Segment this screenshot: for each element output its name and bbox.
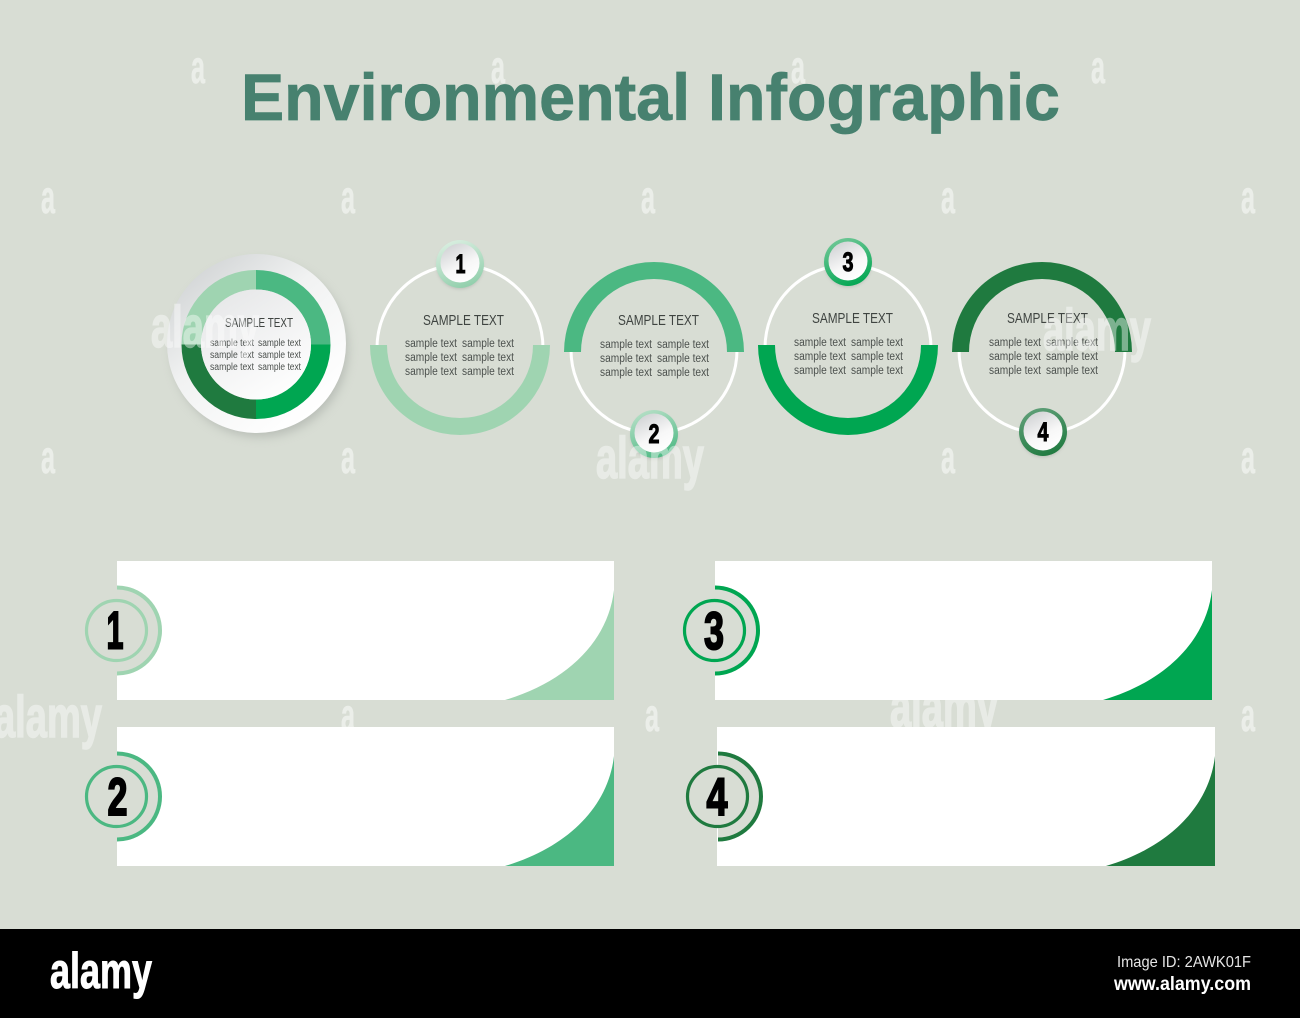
heading 3: SAMPLE TEXT (812, 310, 893, 327)
donut segment: light green (182, 270, 256, 344)
watermarks: alamy (1043, 298, 1151, 363)
badge 4: 4 (1038, 417, 1048, 447)
text 2: sample text (600, 367, 653, 379)
watermarks: a (791, 41, 805, 93)
text 4: sample text (1046, 365, 1099, 377)
text 2: sample text (657, 339, 710, 351)
text 3: sample text (851, 337, 904, 349)
watermarks: a (1091, 41, 1105, 93)
donut text: sample text (210, 362, 254, 373)
number marker 4: 4 (706, 768, 728, 827)
arc: dark green upper (952, 262, 1132, 352)
title: Environmental Infographic (241, 60, 1060, 134)
watermarks: alamy (596, 426, 704, 491)
watermarks: alamy (151, 295, 259, 360)
text 2: sample text (657, 367, 710, 379)
footer logo: alamy (50, 943, 152, 999)
text 3 (794, 337, 904, 377)
panel: circle 1 (370, 240, 550, 435)
text 4: sample text (989, 337, 1042, 349)
donut text: sample text (258, 350, 301, 361)
watermarks: a (1241, 431, 1255, 483)
badge 1: 1 (456, 249, 466, 279)
text 1: sample text (462, 366, 515, 378)
footer bar (0, 929, 1300, 1018)
donut text: sample text (258, 338, 301, 349)
text 3: sample text (794, 365, 847, 377)
badge 3: 3 (842, 247, 854, 277)
watermarks: a (41, 171, 55, 223)
text 2: sample text (657, 353, 710, 365)
text 1: sample text (405, 338, 458, 350)
donut segment: bright green (256, 344, 330, 419)
panel: circle 4 (952, 262, 1132, 457)
text 4: sample text (1046, 351, 1099, 363)
watermarks (0, 41, 1255, 750)
watermarks: a (191, 41, 205, 93)
number marker 2: 2 (108, 768, 128, 827)
badge 2 (630, 410, 678, 459)
donut text: sample text (210, 338, 254, 349)
arc: light green lower (370, 345, 550, 435)
panel: card 3 (684, 561, 1212, 700)
text 1: sample text (462, 338, 515, 350)
number marker 2 (86, 752, 162, 841)
watermarks: a (941, 431, 955, 483)
arc: mid green upper (564, 262, 744, 352)
panel: overview donut (167, 254, 348, 437)
donut text: sample text (210, 350, 254, 361)
text 3: sample text (851, 365, 904, 377)
badge 3 (824, 238, 872, 287)
panel: circle 3 (758, 238, 938, 435)
heading 2: SAMPLE TEXT (618, 312, 699, 329)
watermarks: a (341, 689, 355, 741)
text 4: sample text (989, 365, 1042, 377)
donut centre disc (201, 290, 311, 400)
heading 1: SAMPLE TEXT (423, 312, 504, 329)
card corner 2 (505, 756, 614, 866)
donut text (210, 338, 301, 373)
text 2: sample text (600, 339, 653, 351)
text 1: sample text (405, 352, 458, 364)
badge 2: 2 (648, 419, 660, 449)
watermarks: a (941, 171, 955, 223)
text 4: sample text (1046, 337, 1099, 349)
number marker 1: 1 (106, 602, 124, 660)
watermarks: a (341, 431, 355, 483)
number marker 3: 3 (704, 602, 724, 661)
watermarks: a (41, 431, 55, 483)
text 3: sample text (851, 351, 904, 363)
text 3: sample text (794, 351, 847, 363)
text 4 (989, 337, 1099, 377)
number marker 3 (684, 586, 760, 675)
arc: bright green lower (758, 345, 938, 435)
donut segment: dark green (182, 344, 256, 419)
website: www.alamy.com (1113, 974, 1251, 995)
text 2 (600, 339, 710, 379)
card corner 3 (1103, 590, 1212, 700)
donut segment: mid green (256, 270, 330, 344)
text 1 (405, 338, 515, 378)
text 1: sample text (405, 366, 458, 378)
card corner 4 (1106, 756, 1215, 866)
watermarks: a (1241, 171, 1255, 223)
watermarks: a (491, 41, 505, 93)
text 3: sample text (794, 337, 847, 349)
card corner 1 (505, 590, 614, 700)
watermarks: a (341, 171, 355, 223)
text 4: sample text (989, 351, 1042, 363)
badge 1 (436, 240, 484, 289)
text 1: sample text (462, 352, 515, 364)
donut heading: SAMPLE TEXT (225, 315, 293, 330)
panel: circle 2 (564, 262, 744, 459)
heading 4: SAMPLE TEXT (1007, 310, 1088, 327)
watermarks: a (645, 689, 659, 741)
number marker 1 (86, 586, 162, 675)
panel: card 1 (86, 561, 614, 700)
panel: card 2 (86, 727, 614, 866)
number marker 4 (688, 752, 763, 841)
watermarks: a (641, 171, 655, 223)
image id: Image ID: 2AWK01F (1117, 954, 1251, 971)
donut text: sample text (258, 362, 301, 373)
watermarks: alamy (890, 675, 998, 740)
panel: card 4 (688, 727, 1215, 866)
watermarks: a (1241, 689, 1255, 741)
text 2: sample text (600, 353, 653, 365)
badge 4 (1019, 408, 1067, 457)
